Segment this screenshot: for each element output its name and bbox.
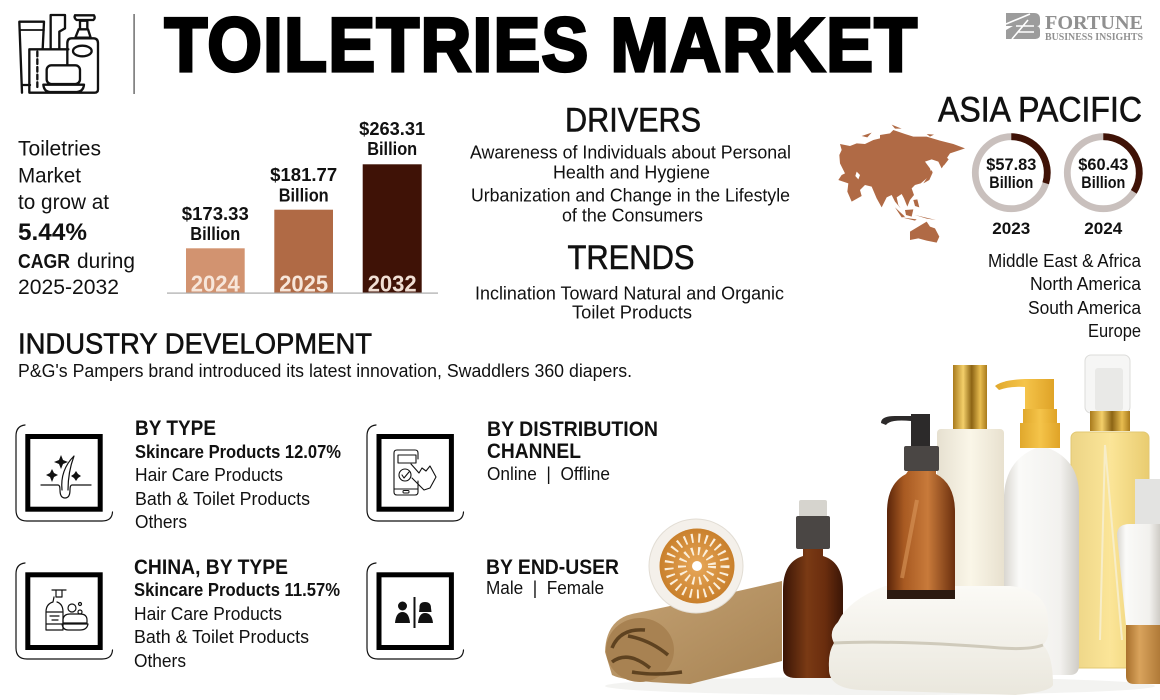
oil bottle bbox=[1071, 355, 1149, 668]
text block: CAGR statement: 5.44% bbox=[18, 219, 87, 246]
white folded towels bbox=[829, 586, 1053, 695]
card: by end-user: Male | Female bbox=[486, 578, 604, 598]
text block: CAGR statement: Toiletries bbox=[18, 138, 101, 160]
cream bottle bbox=[937, 365, 1004, 594]
bar chart: market size: $181.77 bbox=[270, 165, 337, 185]
list: other regions: South America bbox=[1028, 298, 1142, 318]
panel: drivers: Health and Hygiene bbox=[553, 162, 710, 182]
icon: hair follicle bbox=[16, 425, 112, 521]
title: TOILETRIES MARKET bbox=[164, 3, 918, 88]
card: China by type: Hair Care Products bbox=[134, 604, 282, 624]
panel: trends: TRENDS bbox=[568, 239, 694, 277]
photo: toiletry products on towels bbox=[605, 355, 1160, 695]
large amber bottle bbox=[881, 414, 955, 599]
map: Asia Pacific bbox=[838, 125, 965, 243]
panel: drivers bbox=[470, 102, 791, 226]
card: China by type: CHINA, BY TYPE bbox=[134, 556, 288, 579]
text block: CAGR statement bbox=[18, 138, 135, 299]
card: by type: BY TYPE bbox=[135, 417, 216, 440]
card: by distribution channel: CHANNEL bbox=[487, 440, 581, 463]
donut: 2023: Billion bbox=[989, 173, 1033, 192]
card: China by type: Bath & Toilet Products bbox=[134, 627, 309, 647]
card: by type bbox=[16, 417, 341, 532]
heading: Asia Pacific: ASIA PACIFIC bbox=[938, 91, 1142, 130]
logo: Fortune Business Insights: FORTUNE bbox=[1045, 12, 1143, 34]
card: China by type bbox=[16, 556, 340, 671]
card: by distribution channel: BY DISTRIBUTION bbox=[487, 418, 658, 441]
bar chart: market size: $263.31 bbox=[359, 119, 425, 139]
bar chart: market size: Billion bbox=[279, 186, 329, 206]
card: by distribution channel bbox=[367, 418, 658, 521]
text block: CAGR statement: Market bbox=[18, 164, 81, 187]
bar chart: market size: 2032 bbox=[368, 270, 417, 296]
icon: soap and dispenser bbox=[16, 563, 112, 659]
card: by type: Hair Care Products bbox=[135, 465, 283, 485]
card: by end-user bbox=[367, 556, 619, 659]
donut: 2023 bbox=[975, 137, 1047, 238]
bar chart: market size: 2024 bbox=[191, 270, 240, 296]
text block: CAGR statement: 2025-2032 bbox=[18, 276, 119, 299]
icon: male and female users bbox=[367, 563, 464, 659]
panel: industry development: INDUSTRY DEVELOPMENT bbox=[18, 328, 372, 360]
icon: toiletries set bbox=[19, 15, 98, 93]
donut: 2024: Billion bbox=[1081, 173, 1125, 192]
brown rolled towel bbox=[605, 581, 782, 684]
donut: 2024: 2024 bbox=[1084, 219, 1123, 238]
panel: drivers: Urbanization and Change in the Lifestyle bbox=[471, 186, 790, 206]
card: China by type: Skincare Products 11.57% bbox=[134, 580, 340, 600]
panel: trends: Inclination Toward Natural and Organic bbox=[475, 283, 784, 303]
text block: CAGR statement: during bbox=[77, 250, 135, 273]
donut: 2023: 2023 bbox=[992, 219, 1030, 238]
donut: 2024 bbox=[1067, 137, 1139, 238]
panel: industry development: P&G's Pampers brand introduced its latest innovation, Swaddlers 360 diapers. bbox=[18, 361, 632, 381]
front white tube bbox=[1117, 479, 1160, 684]
card: by type: Others bbox=[135, 512, 187, 532]
panel: trends: Toilet Products bbox=[572, 302, 692, 322]
bar chart: market size: Billion bbox=[190, 224, 240, 244]
donut: 2023: $57.83 bbox=[986, 155, 1036, 174]
bar chart: market size bbox=[167, 119, 438, 296]
panel: industry development bbox=[18, 328, 632, 381]
icon: phone with tapping hand bbox=[367, 425, 464, 521]
card: by type: Bath & Toilet Products bbox=[135, 489, 310, 509]
list: other regions: Europe bbox=[1088, 321, 1141, 341]
card: by type: Skincare Products 12.07% bbox=[135, 442, 341, 462]
panel: drivers: of the Consumers bbox=[562, 206, 703, 226]
bar chart: market size: Billion bbox=[367, 139, 417, 159]
text block: CAGR statement: CAGR bbox=[18, 251, 70, 273]
panel: drivers: Awareness of Individuals about Personal bbox=[470, 142, 791, 162]
logo: Fortune Business Insights bbox=[1006, 12, 1143, 43]
panel: trends bbox=[475, 239, 784, 322]
bar chart: market size: $173.33 bbox=[182, 204, 249, 224]
small amber bottle bbox=[783, 500, 843, 678]
panel: drivers: DRIVERS bbox=[565, 102, 701, 140]
list: other regions bbox=[988, 251, 1142, 341]
white pump bottle bbox=[995, 379, 1079, 675]
bar chart: market size: 2025 bbox=[279, 270, 328, 296]
list: other regions: Middle East & Africa bbox=[988, 251, 1142, 271]
brush bbox=[649, 519, 743, 613]
divider bbox=[133, 14, 135, 94]
card: by distribution channel: Online | Offline bbox=[487, 464, 610, 484]
donut: 2024: $60.43 bbox=[1078, 155, 1128, 174]
logo: Fortune Business Insights: BUSINESS INSIGHTS bbox=[1045, 32, 1143, 43]
list: other regions: North America bbox=[1030, 274, 1142, 294]
card: by end-user: BY END-USER bbox=[486, 556, 619, 579]
card: China by type: Others bbox=[134, 651, 186, 671]
text block: CAGR statement: to grow at bbox=[18, 191, 109, 214]
